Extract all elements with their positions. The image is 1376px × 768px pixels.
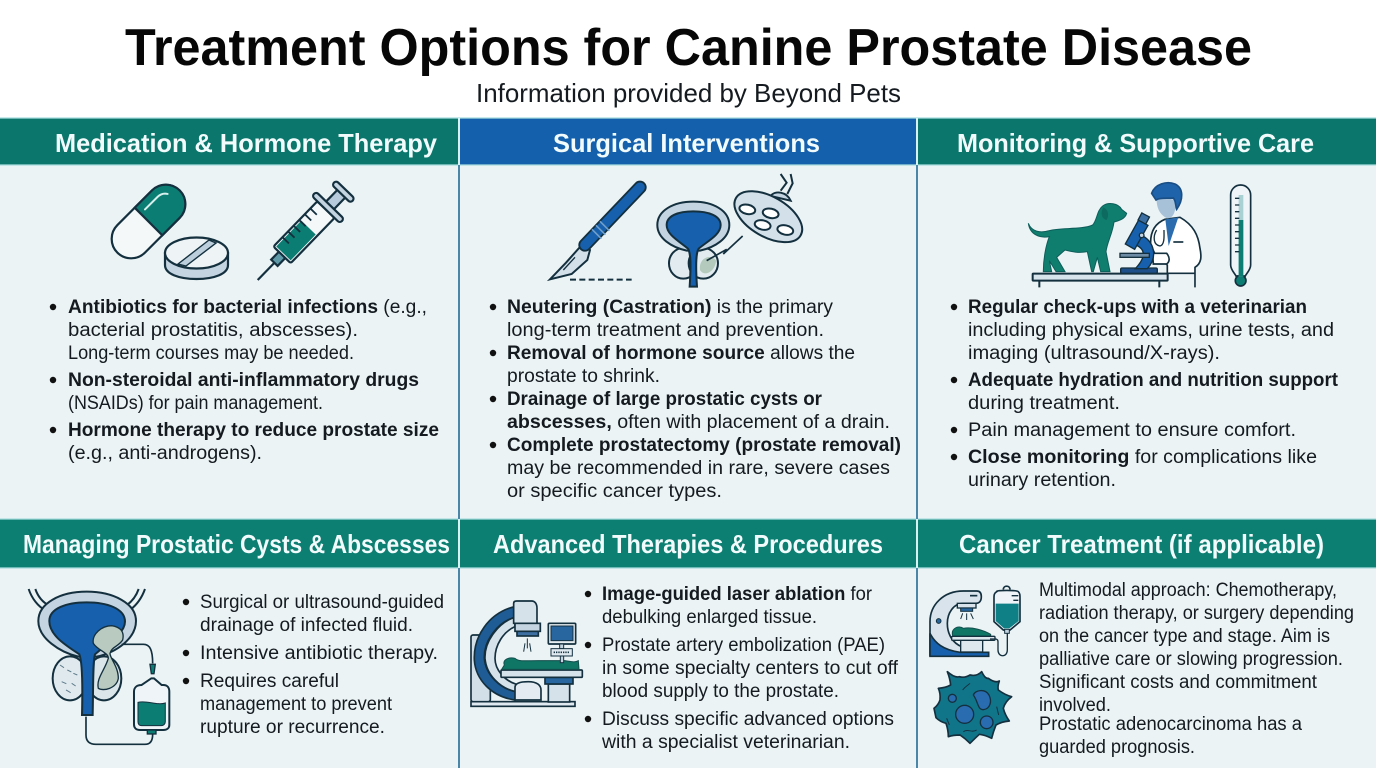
title: Treatment Options for Canine Prostate Disease (125, 19, 1252, 77)
list: surgical: Drainage of large prostatic cysts or (507, 389, 823, 410)
list: surgical: may be recommended in rare, severe cases (507, 458, 890, 479)
list: surgical: long-term treatment and prevention. (507, 320, 824, 341)
text: cancer: involved. (1039, 695, 1111, 716)
panel: medication and hormone therapy (0, 118, 459, 519)
list: cysts: rupture or recurrence. (200, 717, 385, 738)
header: medication (0, 118, 459, 165)
text: cancer: Significant costs and commitment (1039, 672, 1318, 693)
list: surgical: abscesses, often with placement of a drain. (507, 412, 890, 433)
icon: dog on exam table (1028, 204, 1168, 287)
list: medication: (e.g., anti-androgens). (68, 443, 262, 464)
panel: managing prostatic cysts and abscesses (0, 519, 459, 768)
icon: cancer cell (934, 672, 1012, 743)
text: cancer: palliative care or slowing progression. (1039, 649, 1343, 670)
list: cysts: Intensive antibiotic therapy. (200, 643, 438, 664)
icon: capsule (104, 177, 193, 266)
list: monitoring: imaging (ultrasound/X-rays). (968, 343, 1220, 364)
icon: tablet (165, 238, 228, 279)
panel: surgical interventions (459, 118, 917, 519)
header: cancer (917, 519, 1376, 568)
list: cysts (183, 592, 444, 738)
header: advanced: Advanced Therapies & Procedures (493, 529, 883, 559)
list: advanced: Discuss specific advanced options (602, 709, 894, 730)
list: advanced: in some specialty centers to cut off (602, 658, 899, 679)
list: medication: (NSAIDs) for pain management. (68, 393, 323, 414)
list: monitoring: Adequate hydration and nutrition support (968, 370, 1339, 391)
header: advanced (459, 519, 917, 568)
list: cysts: management to prevent (200, 694, 393, 715)
list: cysts: Surgical or ultrasound-guided (200, 592, 444, 613)
icon: syringe (244, 176, 359, 294)
list: advanced: Image-guided laser ablation for (602, 584, 873, 605)
header: surgical: Surgical Interventions (553, 128, 820, 158)
list: monitoring: Close monitoring for complications like (968, 447, 1317, 468)
icon: veterinarian (1151, 183, 1201, 287)
text: cancer: Multimodal approach: Chemotherapy, (1039, 580, 1337, 601)
list: medication (50, 297, 439, 464)
icon: radiation machine and IV bag (930, 586, 1020, 656)
icon: microscope (1120, 213, 1157, 273)
text: cancer: on the cancer type and stage. Aim is (1039, 626, 1330, 647)
text: cancer: radiation therapy, or surgery depending (1039, 603, 1354, 624)
list: advanced: debulking enlarged tissue. (602, 607, 817, 628)
list: surgical: Neutering (Castration) is the primary (507, 297, 834, 318)
list: advanced: blood supply to the prostate. (602, 681, 839, 702)
icon: surgical lamp (726, 174, 811, 253)
icon: bladder with abscess and drainage bag (29, 589, 169, 744)
icon: scalpel (550, 187, 640, 280)
panel: cancer treatment (917, 519, 1376, 768)
header: monitoring (917, 118, 1376, 165)
text: cancer: guarded prognosis. (1039, 737, 1195, 758)
header: medication: Medication & Hormone Therapy (55, 128, 438, 158)
panel: advanced therapies and procedures (459, 519, 917, 768)
header: cancer: Cancer Treatment (if applicable) (959, 529, 1324, 559)
list: advanced: Prostate artery embolization (PAE) (602, 635, 885, 656)
list: cysts: drainage of infected fluid. (200, 615, 413, 636)
text: cancer (1039, 580, 1354, 758)
icon: thermometer (1231, 185, 1251, 286)
list: medication: bacterial prostatitis, abscesses). (68, 320, 358, 341)
list: medication: Long-term courses may be needed. (68, 343, 354, 364)
header: surgical (459, 118, 917, 165)
header: cysts (0, 519, 459, 568)
subtitle: Information provided by Beyond Pets (476, 78, 901, 108)
list: advanced (585, 584, 899, 753)
icon: C-arm imaging suite (471, 601, 582, 706)
list: advanced: with a specialist veterinarian. (601, 732, 850, 753)
icon: bladder and prostate (657, 202, 743, 287)
list: cysts: Requires careful (200, 671, 339, 692)
list: medication: Antibiotics for bacterial infections (e.g., (68, 297, 427, 318)
list: surgical: Complete prostatectomy (prostate removal) (507, 435, 901, 456)
header: monitoring: Monitoring & Supportive Care (957, 128, 1314, 158)
list: monitoring: urinary retention. (968, 470, 1116, 491)
header: cysts: Managing Prostatic Cysts & Abscesses (23, 529, 450, 559)
list: monitoring: including physical exams, urine tests, and (968, 320, 1334, 341)
list: medication: Hormone therapy to reduce prostate size (68, 420, 439, 441)
list: monitoring (951, 297, 1339, 491)
list: medication: Non-steroidal anti-inflammatory drugs (68, 370, 419, 391)
panel: monitoring and supportive care (917, 118, 1376, 519)
list: monitoring: Regular check-ups with a veterinarian (968, 297, 1307, 318)
list: surgical: Removal of hormone source allows the (507, 343, 855, 364)
list: surgical: prostate to shrink. (507, 366, 660, 387)
list: monitoring: Pain management to ensure comfort. (968, 420, 1296, 441)
list: surgical: or specific cancer types. (507, 481, 722, 502)
list: monitoring: during treatment. (968, 393, 1120, 414)
list: surgical (490, 297, 901, 502)
text: cancer: Prostatic adenocarcinoma has a (1039, 714, 1302, 735)
